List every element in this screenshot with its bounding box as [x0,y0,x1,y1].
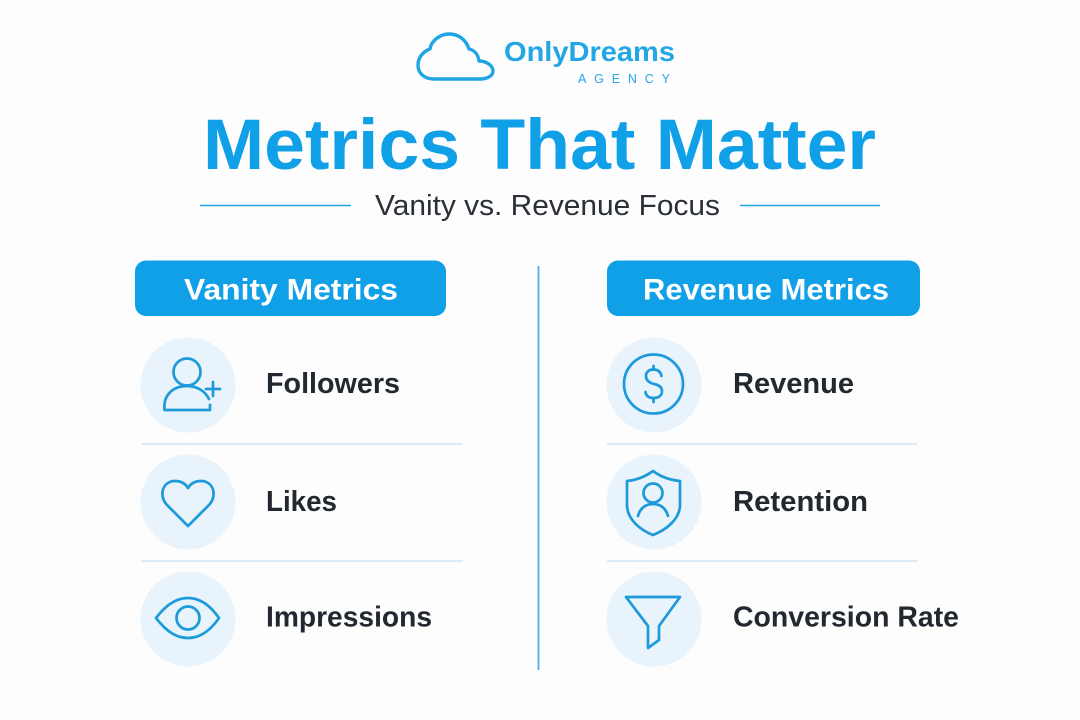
icon: funnel [626,597,680,648]
heading: vanity metrics [135,260,446,316]
icon: dollar coin [624,354,683,414]
row: retention: Retention [733,486,868,518]
icon: cloud [418,34,493,79]
title: Metrics That Matter [203,105,876,185]
row: likes [140,454,337,550]
logo wordmark: OnlyDreams [504,36,675,67]
heading: revenue metrics [607,260,920,316]
row: followers: Followers [266,368,400,400]
row: followers [140,338,400,432]
row: retention [606,454,868,550]
subtitle with rules: Vanity vs. Revenue Focus [375,190,720,222]
row: conversion rate [606,572,959,666]
heading: revenue metrics: Revenue Metrics [643,274,889,306]
panel: revenue metrics [606,260,959,666]
icon: eye [156,598,219,638]
logo [418,34,675,86]
panel: vanity metrics [135,260,446,666]
row: revenue [606,338,854,432]
icon: heart [162,481,214,526]
icon: shield user [627,471,680,535]
row: likes: Likes [266,486,337,518]
heading: vanity metrics: Vanity Metrics [184,274,398,306]
row: impressions [140,572,432,666]
row: conversion rate: Conversion Rate [733,602,959,634]
row: revenue: Revenue [733,368,854,400]
logo tagline: AGENCY [578,72,671,86]
icon: user plus [164,358,220,410]
row: impressions: Impressions [266,602,432,634]
